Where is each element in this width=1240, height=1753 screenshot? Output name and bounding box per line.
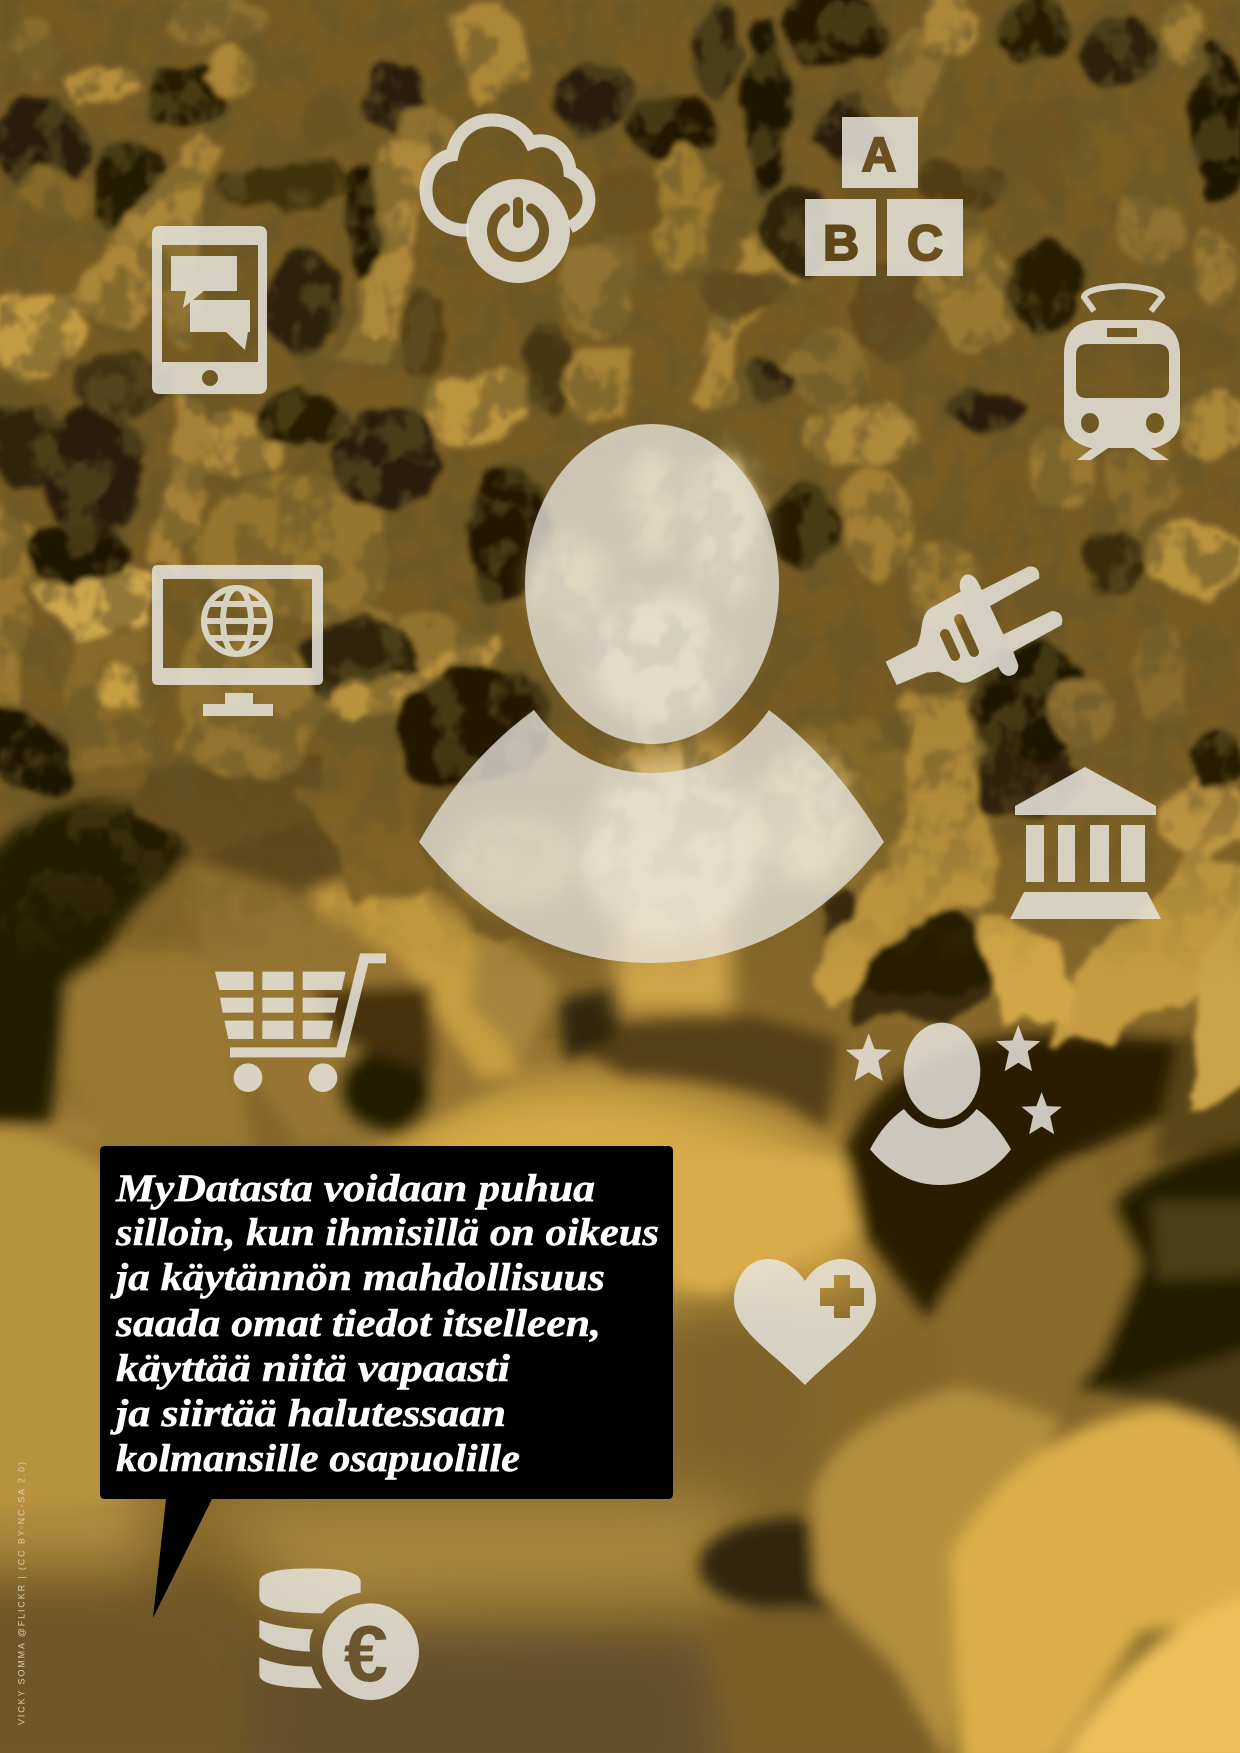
icon: ABC blocks xyxy=(805,117,963,276)
icon: ABC blocks: A xyxy=(862,129,896,182)
icon: monitor with globe xyxy=(152,565,323,716)
icon: ABC blocks: C xyxy=(907,215,943,271)
callout text: MyDatasta voidaan puhua xyxy=(115,1167,595,1210)
callout text: käyttää niitä vapaasti xyxy=(116,1347,510,1390)
icon: heart with cross xyxy=(734,1259,876,1385)
icon: classical bank building xyxy=(1010,767,1161,919)
callout text: ja siirtää halutessaan xyxy=(109,1392,506,1435)
icon: person with stars xyxy=(846,1023,1062,1185)
callout text: ja käytännön mahdollisuus xyxy=(109,1256,605,1299)
icon: ABC blocks: B xyxy=(823,215,859,271)
photo credit: VICKY SOMMA @FLICKR | (CC BY-NC-SA 2.0) xyxy=(16,1462,26,1725)
callout: speech bubble xyxy=(100,1146,673,1618)
raised arm and hands behind the central silhouette xyxy=(447,447,855,1012)
callout text: kolmansille osapuolille xyxy=(116,1437,520,1480)
lower blurred foreground xyxy=(0,1076,866,1753)
icon: tram xyxy=(1064,286,1180,460)
icon: tablet with speech bubbles xyxy=(152,226,267,394)
callout text: saada omat tiedot itselleen, xyxy=(115,1302,601,1345)
icon: power plug xyxy=(886,566,1062,685)
icon: coin stack with euro: € xyxy=(344,1609,388,1698)
dense crowd xyxy=(0,0,1240,1118)
icon: cloud with power button xyxy=(426,120,589,283)
icon: coin stack with euro xyxy=(259,1568,419,1700)
icon: central person silhouette xyxy=(419,424,884,963)
callout text: silloin, kun ihmisillä on oikeus xyxy=(115,1211,659,1254)
tone and texture overlay xyxy=(0,0,1240,906)
icon: shopping cart xyxy=(215,953,386,1092)
